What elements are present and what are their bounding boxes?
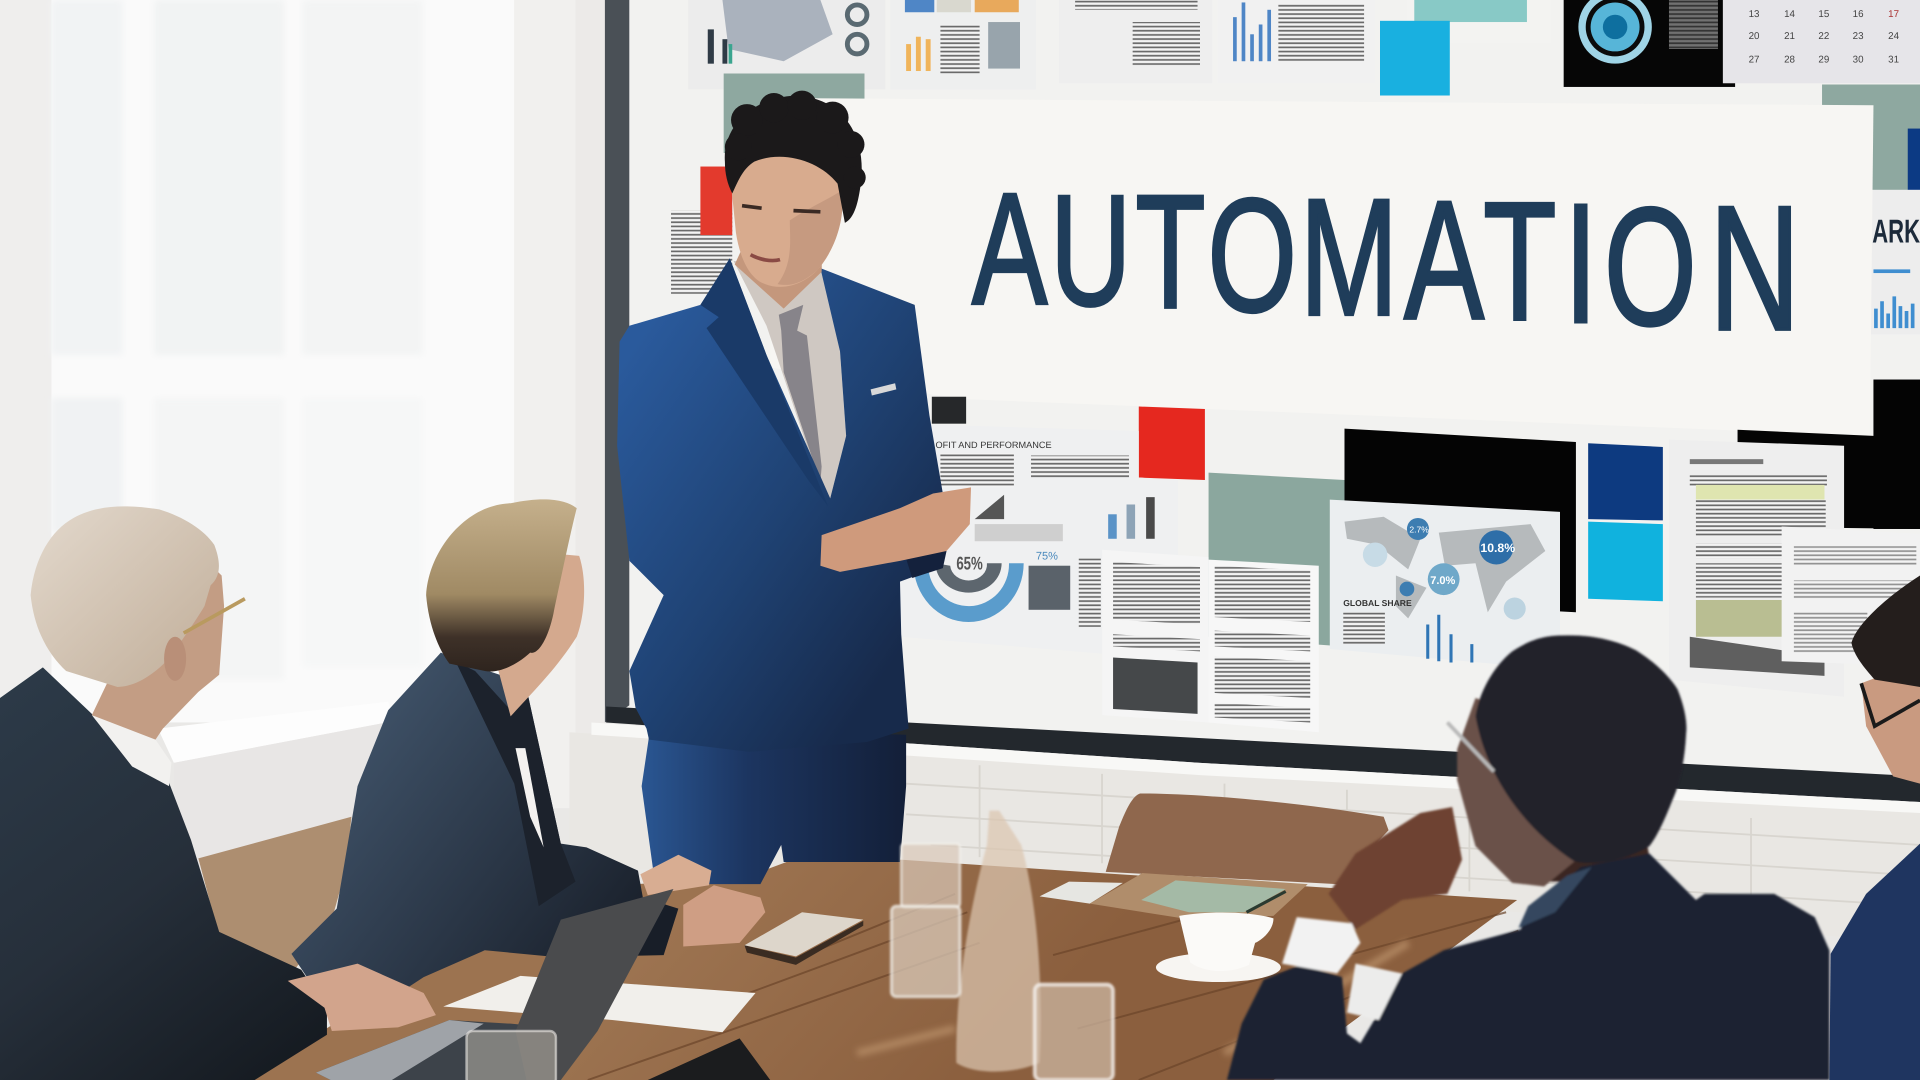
folder and green book — [1090, 873, 1308, 918]
curly hair — [725, 91, 866, 223]
donut chart 65%: 65% — [956, 553, 983, 574]
right chair — [1106, 793, 1389, 884]
white hair — [31, 506, 219, 687]
page: teal chart — [1407, 0, 1551, 43]
dark lapel — [456, 661, 576, 906]
page: profit and performance — [900, 424, 1178, 660]
black infographic panel — [1564, 0, 1735, 87]
calendar page: 22 — [1818, 31, 1830, 42]
calendar page: 31 — [1888, 54, 1900, 65]
bubble: 10.8%: 10.8% — [1480, 542, 1515, 556]
face — [1861, 661, 1920, 784]
title: AUTOMATION: I — [1564, 169, 1598, 359]
mouth — [751, 255, 780, 261]
bald man on the left — [0, 506, 436, 1080]
people pictogram 75%: 75% — [1036, 550, 1058, 562]
title: AUTOMATION: A — [972, 159, 1048, 338]
calendar page: 20 — [1749, 31, 1760, 42]
neck — [1512, 784, 1649, 882]
page: world map report — [688, 0, 885, 89]
presenter — [617, 91, 971, 884]
calendar page: 24 — [1888, 31, 1900, 42]
bubble: 2.7% — [1407, 518, 1429, 540]
label: global share: GLOBAL SHARE — [1343, 600, 1412, 609]
face — [1457, 698, 1580, 887]
tablet — [1040, 882, 1123, 904]
calendar page: 16 — [1853, 9, 1864, 20]
second cuff — [1347, 964, 1402, 1020]
items on table — [744, 811, 1308, 1080]
side page with ARK heading — [1871, 190, 1920, 334]
trousers — [642, 729, 906, 884]
jacket — [617, 258, 943, 752]
shirt and tie — [733, 261, 846, 498]
far sleeve cuff — [904, 551, 947, 578]
title: AUTOMATION: T — [1135, 162, 1206, 342]
first cuff — [1282, 917, 1360, 973]
eyes — [742, 206, 820, 212]
calendar page — [1723, 0, 1920, 83]
page: facts and climate text — [1669, 440, 1844, 697]
page: far right overlay — [1782, 527, 1920, 666]
page: text report — [1059, 0, 1212, 83]
brick wall below the board — [569, 732, 1920, 943]
title: AUTOMATION: T — [1483, 168, 1556, 356]
calendar page: 27 — [1749, 54, 1760, 65]
calendar page: 21 — [1784, 31, 1796, 42]
title: AUTOMATION: U — [1050, 163, 1131, 339]
jacket — [1829, 844, 1920, 1080]
laptop screen — [516, 889, 673, 1080]
title: AUTOMATION: M — [1300, 164, 1398, 350]
calendar page: 13 — [1749, 9, 1760, 20]
blouse — [516, 748, 544, 847]
ear — [164, 637, 186, 681]
page: bar chart report — [1217, 0, 1375, 83]
near glass — [467, 1031, 556, 1080]
clipboard — [744, 912, 863, 965]
bubble: 7.0% — [1428, 563, 1460, 595]
photo: silhouettes — [1113, 658, 1198, 714]
head — [1476, 635, 1686, 863]
title: AUTOMATION: O — [1208, 165, 1297, 345]
title: AUTOMATION: A — [1404, 167, 1484, 355]
neck and face — [496, 551, 584, 716]
glasses — [184, 599, 245, 633]
face — [731, 152, 842, 287]
heading: profit and performance: OFIT AND PERFORMANCE — [936, 440, 1052, 451]
neck — [735, 220, 823, 309]
table items front — [316, 889, 770, 1080]
calendar page: 15 — [1818, 9, 1830, 20]
donut chart 65% — [913, 553, 1024, 622]
glasses — [1447, 722, 1494, 771]
hand — [288, 964, 436, 1031]
cup and saucer — [1156, 913, 1281, 982]
upper hand — [640, 855, 711, 895]
calendar page: 29 — [1818, 54, 1830, 65]
calendar page: 14 — [1784, 9, 1796, 20]
blonde hair — [426, 499, 577, 672]
cyan square — [1380, 21, 1450, 96]
suit collar — [1518, 867, 1592, 928]
page: charts report — [890, 0, 1036, 89]
laptop base — [316, 1020, 588, 1080]
calendar page: 17 — [1888, 9, 1900, 20]
pocket square — [871, 383, 896, 396]
lower colour blocks — [932, 380, 1920, 647]
water bottle — [956, 811, 1041, 1072]
suit — [1227, 853, 1829, 1080]
shaded cheek — [778, 190, 843, 285]
page: global share map — [1330, 500, 1560, 670]
hands — [820, 487, 971, 572]
presentation board — [591, 0, 1920, 813]
man on the right — [1227, 635, 1829, 1080]
face and neck — [92, 539, 224, 740]
arm hand — [1329, 807, 1462, 929]
calendar page: 30 — [1853, 54, 1864, 65]
calendar page: 23 — [1853, 31, 1864, 42]
top row of report pages — [688, 0, 1920, 96]
blonde woman — [291, 499, 765, 998]
left chair — [198, 817, 351, 967]
bubble: 10.8% — [1479, 530, 1515, 564]
dark corner object — [648, 1038, 770, 1080]
conference table — [245, 857, 1518, 1080]
suit — [0, 667, 327, 1080]
title: AUTOMATION: O — [1604, 174, 1697, 361]
AUTOMATION banner — [770, 98, 1873, 436]
collar — [92, 715, 171, 786]
calendar page: 28 — [1784, 54, 1796, 65]
glasses of water — [891, 844, 1113, 1080]
bubble: 2.7%: 2.7% — [1409, 527, 1429, 535]
side swatches and left note — [671, 73, 1920, 529]
left lapel — [700, 258, 828, 506]
bubble: 7.0%: 7.0% — [1430, 574, 1455, 587]
woman at far right — [1829, 576, 1920, 1080]
hair — [1851, 576, 1920, 687]
lower hand — [683, 885, 765, 947]
white notebook — [443, 976, 756, 1032]
title: AUTOMATION: N — [1709, 169, 1800, 367]
jacket — [291, 653, 678, 998]
people pictogram 75% — [1029, 550, 1070, 610]
glasses — [1861, 683, 1920, 726]
text pages with photo — [1102, 550, 1319, 732]
